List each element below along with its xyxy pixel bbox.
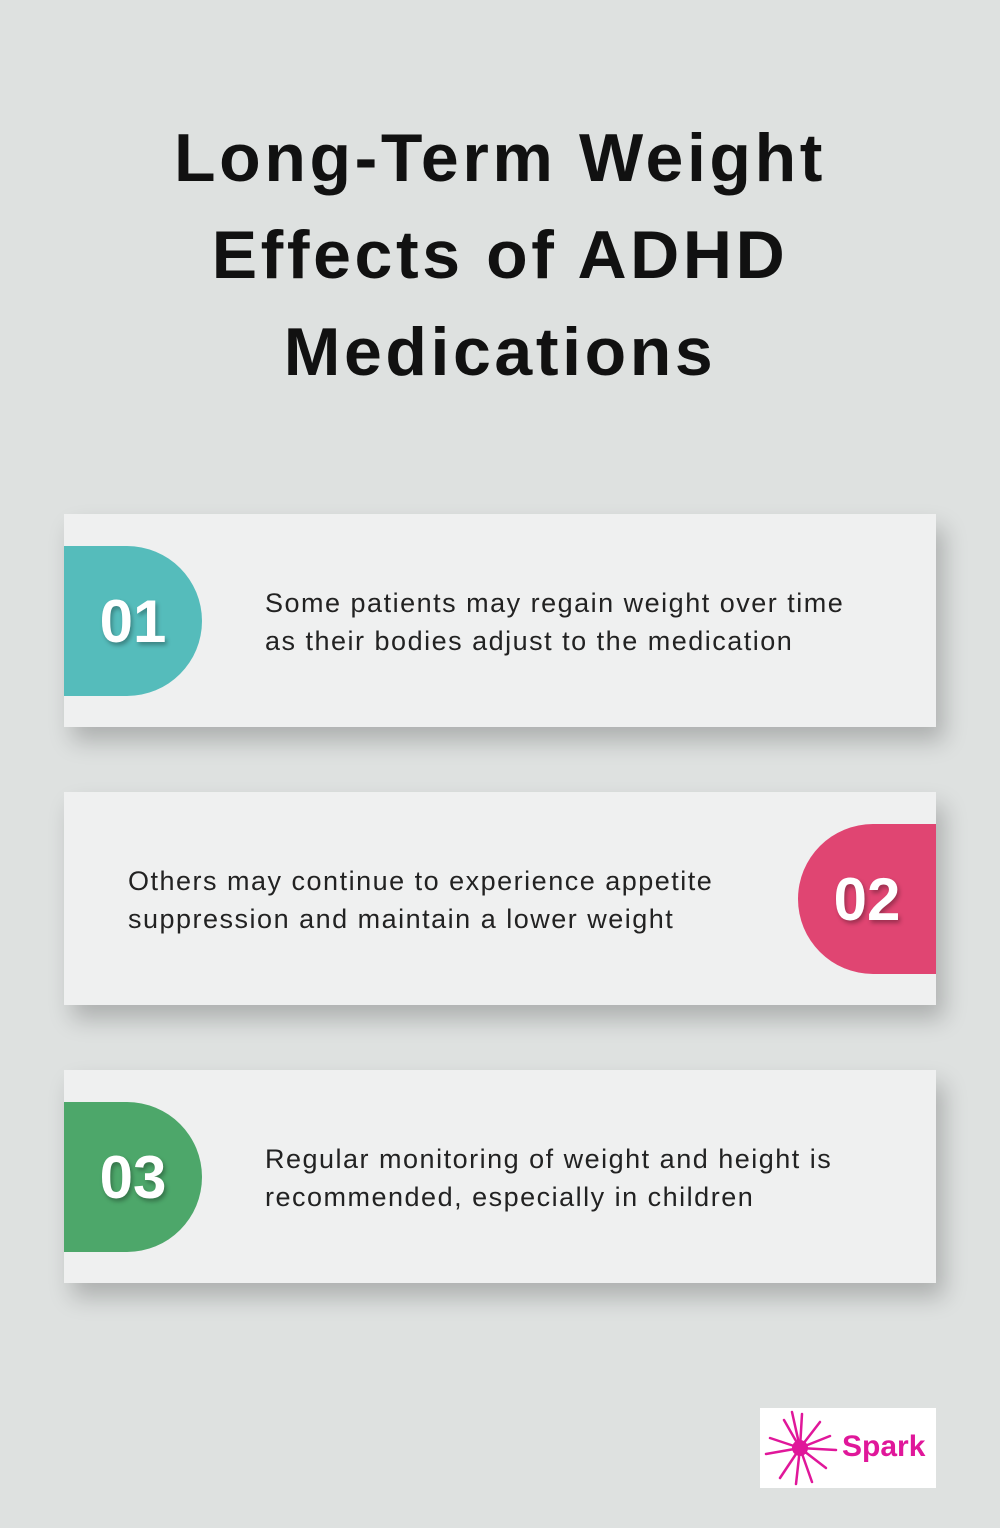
title — [174, 120, 826, 390]
text 1: Some patients may regain weight over time — [265, 588, 844, 618]
text 1: as their bodies adjust to the medication — [265, 626, 793, 656]
text 3: recommended, especially in children — [265, 1182, 754, 1212]
text 2: suppression and maintain a lower weight — [128, 904, 674, 934]
logo: Spark — [760, 1408, 936, 1488]
badge 01 — [64, 546, 202, 696]
badge 01: 01 — [100, 588, 166, 654]
title: Medications — [284, 314, 716, 390]
text 3 — [265, 1144, 832, 1212]
badge 03 — [64, 1102, 202, 1252]
panel: card 2 — [64, 792, 936, 1005]
text 2 — [128, 866, 713, 934]
text 2: Others may continue to experience appetite — [128, 866, 713, 896]
logo text: Spark — [842, 1430, 925, 1463]
text 1 — [265, 588, 844, 656]
badge 02: 02 — [834, 866, 900, 932]
badge 03: 03 — [100, 1144, 166, 1210]
panel: card 1 — [64, 514, 936, 727]
text 3: Regular monitoring of weight and height is — [265, 1144, 832, 1174]
panel: card 3 — [64, 1070, 936, 1283]
badge 02 — [798, 824, 936, 974]
title: Long-Term Weight — [174, 120, 826, 196]
icon: spark star — [764, 1410, 838, 1486]
title: Effects of ADHD — [212, 217, 788, 293]
